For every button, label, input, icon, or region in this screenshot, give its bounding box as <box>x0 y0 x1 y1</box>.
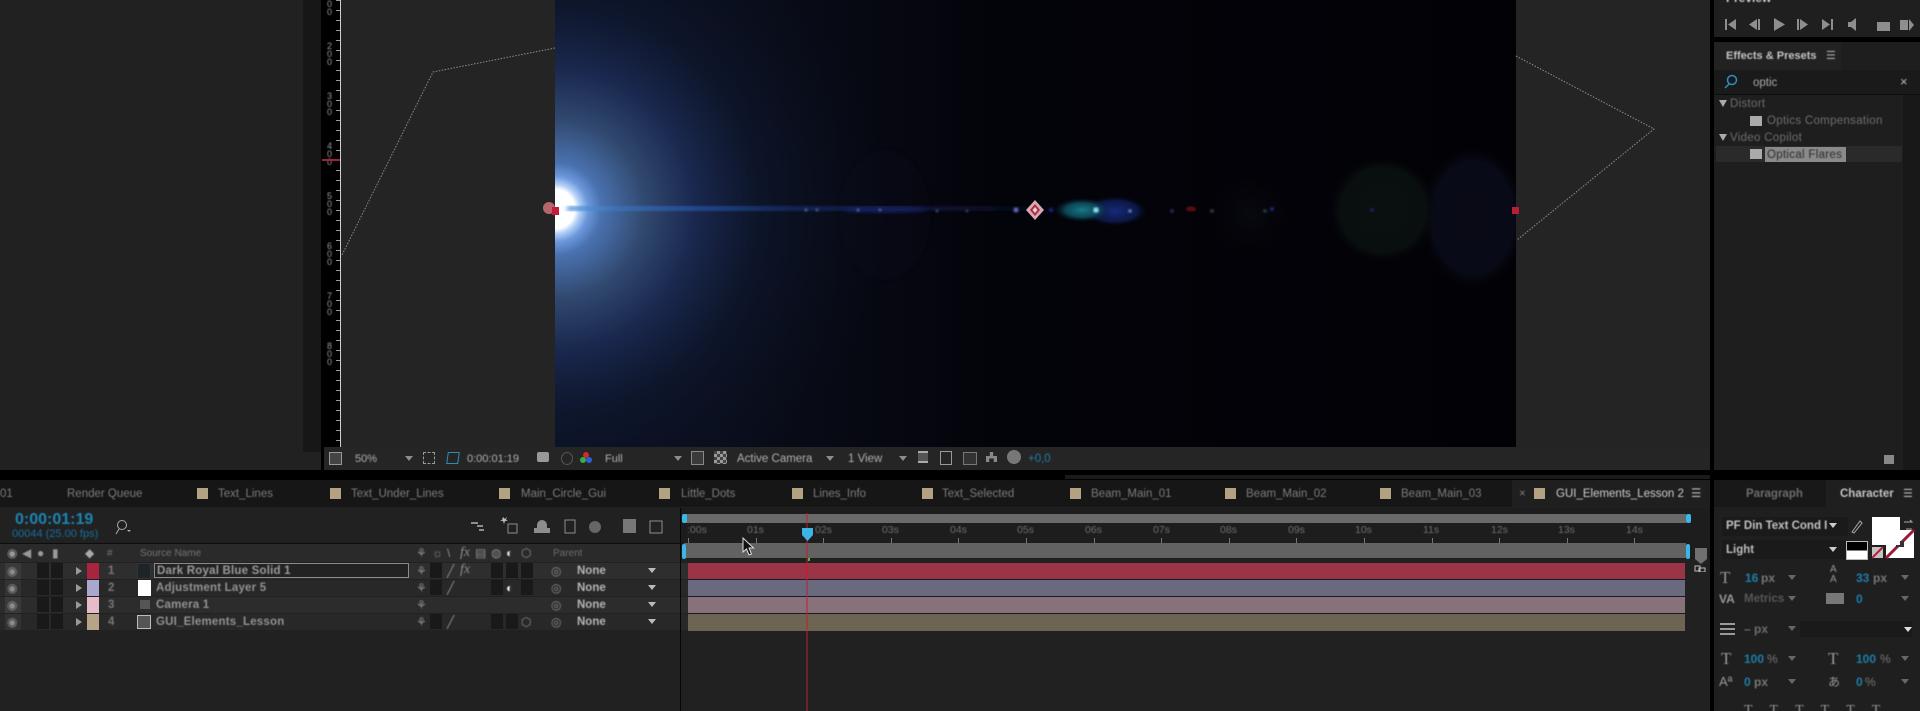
layer row 4: 4 <box>108 616 114 628</box>
vertical and horizontal scale row: T <box>1721 649 1731 668</box>
time ruler labels: :00s <box>687 524 707 536</box>
tab labels: Text_Lines <box>218 488 273 500</box>
column headers: ⬡ <box>521 546 531 560</box>
layer bars <box>688 563 1685 631</box>
viewer timecode: 0:00:01:19 <box>467 453 519 465</box>
column headers: Source Name <box>140 548 201 559</box>
vertical and horizontal scale row: 100 <box>1744 652 1764 666</box>
column headers: ◉ <box>7 546 17 560</box>
layer row 3: ◎ <box>551 598 561 612</box>
view dropdown arrow <box>899 456 907 461</box>
zoom level: 50% <box>355 453 377 465</box>
icon: search <box>1724 74 1738 88</box>
composition frame with lens flare <box>555 0 1516 447</box>
icon: layer search <box>116 520 131 534</box>
tab labels: ☰ <box>1691 488 1701 500</box>
resolution dropdown arrow <box>674 456 682 461</box>
column headers: \ <box>447 546 450 560</box>
paragraph tab <box>1714 480 1826 507</box>
stroke color swatch <box>1872 517 1915 559</box>
layer row 4: ◉ <box>7 615 17 629</box>
tab labels: Lines_Info <box>813 488 866 500</box>
paragraph label: Paragraph <box>1746 488 1803 500</box>
column headers: ▮ <box>52 546 59 560</box>
layer row 4 <box>0 614 688 630</box>
column headers <box>7 545 582 560</box>
vertical ruler: 0 <box>327 249 332 259</box>
panel: preview <box>1714 0 1920 37</box>
tab bar <box>0 480 1710 507</box>
resolution: Full <box>605 453 623 465</box>
column headers: fx <box>460 545 470 560</box>
preview controls <box>1725 18 1914 31</box>
zoom dropdown arrow <box>405 456 413 461</box>
layer row 3: ◉ <box>7 598 17 612</box>
baseline and tsume row: Aª <box>1719 674 1732 689</box>
layer row 2: 2 <box>108 582 114 594</box>
size row: 33 <box>1856 571 1869 585</box>
time ruler labels: 14s <box>1626 524 1643 536</box>
layer row 3 <box>0 597 688 613</box>
baseline and tsume row: px <box>1754 675 1768 689</box>
tab labels: Little_Dots <box>681 488 735 500</box>
vertical ruler: 0 <box>327 7 332 17</box>
vertical ruler: 8 <box>327 341 332 351</box>
active tab background <box>1512 480 1710 507</box>
time ruler labels: 09s <box>1288 524 1305 536</box>
kerning row: Metrics <box>1744 593 1784 605</box>
default colors <box>1846 541 1868 560</box>
baseline and tsume row: あ <box>1828 673 1840 690</box>
vertical and horizontal scale row: % <box>1767 652 1778 666</box>
layer row 3: 3 <box>108 599 114 611</box>
time ruler labels: 04s <box>950 524 967 536</box>
panel: character: A <box>1830 564 1837 575</box>
layer row 2: ◎ <box>551 581 561 595</box>
tab labels: Beam_Main_02 <box>1246 488 1327 500</box>
time ruler labels <box>687 524 1643 543</box>
time ruler labels: 12s <box>1491 524 1508 536</box>
icon: snapshot region <box>329 452 342 465</box>
icon: grid <box>423 452 435 464</box>
column header row <box>0 544 681 562</box>
size row: T <box>1720 568 1730 587</box>
tab labels: GUI_Elements_Lesson 2 <box>1556 488 1684 500</box>
icon: show channel <box>561 452 573 465</box>
layer row 1: ◎ <box>551 564 561 578</box>
column headers: ● <box>37 546 44 560</box>
panel: composition viewer pasteboard <box>340 0 1710 447</box>
effect: optics compensation: Optics Compensation <box>1767 115 1883 127</box>
center anchor point diamond <box>1026 200 1044 220</box>
vertical ruler: 0 <box>327 207 332 217</box>
active camera menu: Active Camera <box>737 453 812 465</box>
vertical ruler: 7 <box>327 291 332 301</box>
panel menu: ☰ <box>1826 50 1836 62</box>
font style: Light <box>1726 544 1754 556</box>
layer row 4: ⬡ <box>521 615 531 629</box>
vertical ruler: 4 <box>327 141 332 151</box>
effects heading: Effects & Presets <box>1726 50 1816 62</box>
motion path dotted lines <box>342 48 1655 255</box>
vertical ruler: 2 <box>327 41 332 51</box>
layer row 3: Camera 1 <box>156 599 209 611</box>
baseline and tsume row <box>1718 673 1909 690</box>
group: distort <box>1719 100 1727 107</box>
icon: 32 bit effect <box>1750 149 1762 159</box>
size row: 16 <box>1745 571 1758 585</box>
layer row 2: ╱ <box>447 581 454 595</box>
font style <box>1722 540 1846 559</box>
layer row 4: GUI_Elements_Lesson <box>156 616 284 628</box>
timeline column divider <box>680 508 681 711</box>
panel: character <box>1714 480 1920 711</box>
scroll bar sliver <box>1065 475 1710 479</box>
tab labels: Text_Selected <box>942 488 1014 500</box>
view layout menu: 1 View <box>848 453 882 465</box>
column headers: ◀ <box>22 546 31 560</box>
stroke width row: – px <box>1744 622 1768 636</box>
panel: left project area <box>0 0 321 470</box>
left layer handle <box>543 202 559 215</box>
time ruler labels: 07s <box>1153 524 1170 536</box>
icon: mask toggle <box>446 452 460 464</box>
time ruler labels: 13s <box>1558 524 1575 536</box>
icon: new bin <box>1884 455 1894 464</box>
eyedropper <box>1851 520 1862 534</box>
layer row 2: None <box>577 582 606 594</box>
tab labels: Main_Circle_Gui <box>521 488 606 500</box>
column headers: # <box>107 548 113 559</box>
icon: timeline toggle <box>963 452 977 465</box>
frame and fps readout: 00044 (25.00 fps) <box>12 528 98 540</box>
exposure value: +0,0 <box>1028 453 1051 465</box>
icon: 32 bit effect <box>1750 116 1762 126</box>
style arrow <box>1829 547 1837 552</box>
panel: effects and presets <box>1714 42 1920 470</box>
layer row 1: Dark Royal Blue Solid 1 <box>157 565 291 577</box>
layer row 3: None <box>577 599 606 611</box>
tab labels: × <box>1519 488 1526 500</box>
menu: ☰ <box>1903 488 1913 500</box>
kerning row <box>1718 592 1909 606</box>
layer row 1: None <box>577 565 606 577</box>
layer row 3: ⚘ <box>416 598 427 612</box>
playhead <box>802 513 813 711</box>
time ruler strip <box>681 508 1710 559</box>
vertical ruler: 0 <box>327 57 332 67</box>
time ruler labels: 10s <box>1355 524 1372 536</box>
layer row 1 <box>0 563 688 579</box>
panel divider <box>0 543 681 544</box>
vertical ruler: 0 <box>327 349 332 359</box>
layer row 1: ╱ <box>447 564 454 578</box>
column headers: ⚘ <box>416 546 427 560</box>
panel right strip <box>1903 95 1920 470</box>
vertical ruler: 3 <box>327 91 332 101</box>
vertical ruler: 0 <box>327 99 332 109</box>
icon: pixel aspect <box>918 451 928 463</box>
selected effect: optical flares: Optical Flares <box>1767 149 1842 161</box>
baseline and tsume row: % <box>1865 675 1876 689</box>
search query: optic <box>1753 77 1777 89</box>
icon: fast preview <box>940 451 952 465</box>
font family arrow <box>1829 523 1837 528</box>
icon: transparency grid <box>714 451 727 464</box>
tab labels: Beam_Main_03 <box>1401 488 1482 500</box>
layer row 1: fx <box>460 562 470 577</box>
layer row 4: ╱ <box>447 615 454 629</box>
icon: RGB channels <box>580 452 592 463</box>
column headers: ◍ <box>491 546 501 560</box>
layer row 4: ◎ <box>551 615 561 629</box>
vertical ruler: 0 <box>327 299 332 309</box>
vertical ruler: 0 <box>327 49 332 59</box>
vertical ruler: 0 <box>327 357 332 367</box>
right layer handle <box>1512 207 1519 214</box>
baseline and tsume row: 0 <box>1744 675 1751 689</box>
layer row 2: ⚘ <box>416 581 427 595</box>
vertical ruler: 0 <box>327 199 332 209</box>
group label: video copilot: Video Copilot <box>1730 132 1802 144</box>
column headers: ◐ <box>506 546 513 560</box>
time ruler labels: 01s <box>747 524 764 536</box>
group label: distort: Distort <box>1730 98 1765 110</box>
timecode: 0:00:01:19 <box>15 511 93 528</box>
vertical ruler: 0 <box>327 107 332 117</box>
icon: exposure <box>1007 450 1021 464</box>
character label: Character <box>1840 488 1894 500</box>
vertical ruler: 5 <box>327 191 332 201</box>
baseline and tsume row: 0 <box>1856 675 1863 689</box>
vertical ruler: 0 <box>327 149 332 159</box>
layer row 1: ⚘ <box>416 564 427 578</box>
selected row <box>1716 146 1902 162</box>
vertical and horizontal scale row: % <box>1880 652 1891 666</box>
time ruler labels: 11s <box>1423 524 1439 536</box>
size row: A <box>1830 574 1837 585</box>
vertical ruler: 0 <box>327 307 332 317</box>
column headers: Parent <box>553 548 582 559</box>
time ruler labels: 08s <box>1220 524 1237 536</box>
time ruler labels: 03s <box>882 524 899 536</box>
timeline switch icons <box>471 517 662 534</box>
time ruler labels: 05s <box>1017 524 1034 536</box>
time ruler labels: 06s <box>1085 524 1102 536</box>
stroke width row <box>1720 622 1912 636</box>
vertical ruler <box>325 0 341 447</box>
layer row 4: None <box>577 616 606 628</box>
vertical and horizontal scale row: 100 <box>1856 652 1876 666</box>
vertical and horizontal scale row <box>1720 649 1909 668</box>
tab labels: Text_Under_Lines <box>351 488 444 500</box>
kerning row: VA <box>1719 592 1735 606</box>
time ruler labels: 02s <box>815 524 832 536</box>
tab labels: Render Queue <box>67 488 142 500</box>
effects tab <box>1714 42 1841 70</box>
vertical and horizontal scale row: T <box>1828 649 1838 668</box>
bar: adjustment layer <box>688 580 1685 596</box>
kerning row: 0 <box>1856 592 1863 606</box>
work area handles <box>682 514 1707 572</box>
tab labels: 01 <box>0 488 13 500</box>
camera dropdown arrow <box>826 456 834 461</box>
viewer toolbar <box>324 447 1710 470</box>
layer row 4: ⚘ <box>416 615 427 629</box>
vertical ruler: 6 <box>327 241 332 251</box>
icon: camera snapshot <box>537 452 549 462</box>
bar: camera <box>688 597 1685 613</box>
column headers: ◆ <box>85 546 94 560</box>
layer row 1: ◉ <box>7 564 17 578</box>
size row <box>1720 564 1909 587</box>
icon: region of interest <box>691 451 704 465</box>
search field <box>1714 70 1920 95</box>
group: video copilot <box>1719 134 1727 141</box>
vertical ruler: 0 <box>327 157 332 167</box>
panel: timeline <box>0 480 1710 711</box>
panel: viewer side strip <box>303 0 321 452</box>
mouse cursor <box>742 537 755 556</box>
size row: px <box>1873 571 1887 585</box>
vertical ruler: 0 <box>327 257 332 267</box>
layer row 2: Adjustment Layer 5 <box>156 582 266 594</box>
layer row 2: ◐ <box>506 581 513 595</box>
tab labels <box>0 488 1701 500</box>
tab labels: Beam_Main_01 <box>1091 488 1172 500</box>
layer row 2 <box>0 580 688 596</box>
work area bar <box>684 543 1686 558</box>
layer row 1: 1 <box>108 565 114 577</box>
column headers: ☼ <box>432 546 443 560</box>
size row: px <box>1761 571 1775 585</box>
font family <box>1722 517 1848 536</box>
search clear: × <box>1900 74 1908 89</box>
layer row 2: ◉ <box>7 581 17 595</box>
bar: precomp <box>688 614 1685 631</box>
navigator bar <box>684 514 1686 523</box>
column headers: ▤ <box>475 546 486 560</box>
icon: flowchart <box>986 452 997 462</box>
bar: red solid <box>688 563 1685 579</box>
font family: PF Din Text Cond I <box>1726 520 1827 532</box>
